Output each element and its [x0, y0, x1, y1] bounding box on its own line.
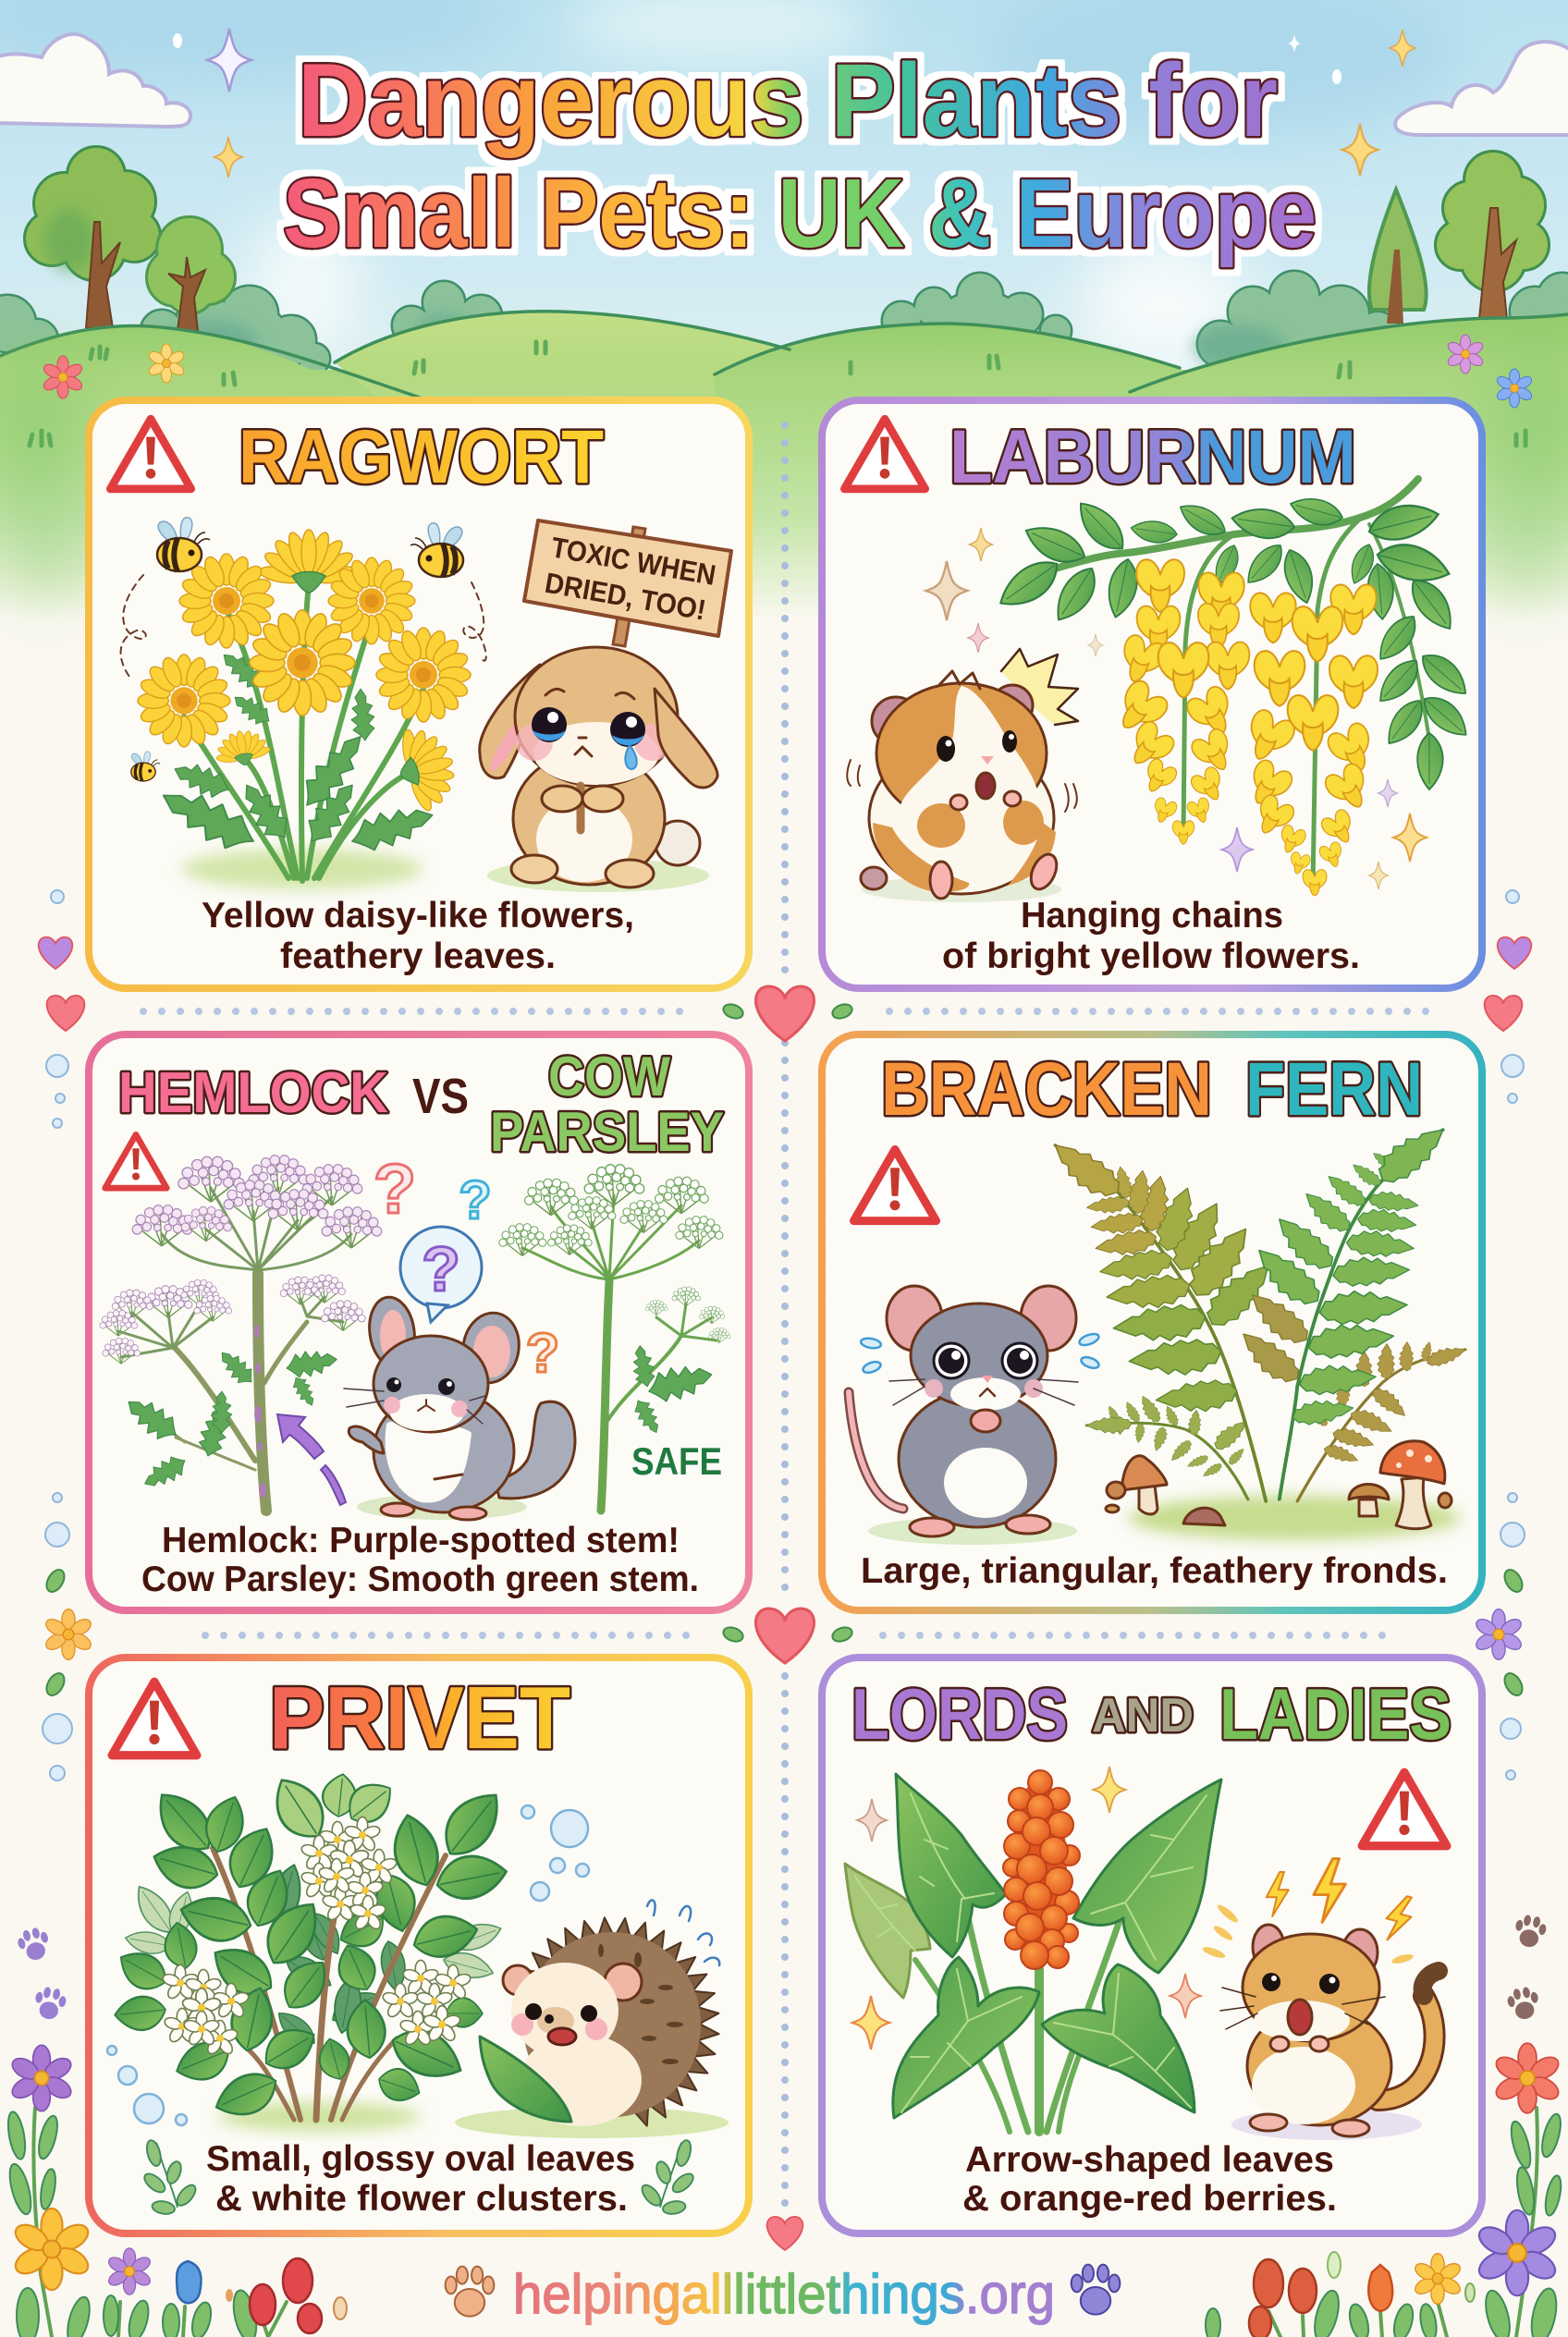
- panel: bracken fern: [822, 1034, 1482, 1610]
- heading: vs: VS: [412, 1069, 469, 1124]
- panel: privet: [89, 1658, 749, 2233]
- caption: [202, 896, 634, 976]
- heading: lords and ladies: LORDS: [851, 1673, 1068, 1755]
- paw left: [446, 2267, 494, 2317]
- caption: Arrow-shaped leaves: [965, 2140, 1334, 2180]
- arrow pointing at stem: [277, 1414, 346, 1505]
- frond: green main: [1231, 1117, 1454, 1499]
- sign: toxic when dried: [524, 520, 731, 646]
- icons: bees: [121, 518, 486, 781]
- question marks: [374, 1150, 559, 1384]
- panel: ragwort: [89, 400, 749, 988]
- caption: [962, 2140, 1337, 2219]
- heading: hemlock: HEMLOCK: [118, 1061, 388, 1125]
- heading: privet: PRIVET: [269, 1669, 570, 1768]
- illustration: chinchilla: [344, 1294, 575, 1520]
- heading: cow parsley: COW: [548, 1046, 670, 1107]
- sign: toxic when dried: TOXIC WHEN: [549, 531, 718, 592]
- sparkles: [852, 1767, 1201, 2049]
- sparkles: [926, 528, 1427, 889]
- cloud left: [0, 34, 190, 127]
- panel: hemlock vs cow parsley: [89, 1034, 749, 1610]
- illustration: worried mouse: [849, 1286, 1100, 1545]
- heading: bracken fern: [881, 1047, 1423, 1132]
- frond: olive main: [1042, 1135, 1280, 1501]
- caption: [141, 1521, 699, 1599]
- caption: Yellow daisy-like flowers,: [202, 896, 634, 936]
- panel: laburnum: [822, 400, 1482, 988]
- caption: feathery leaves.: [280, 936, 556, 976]
- warning icon: [853, 1149, 937, 1221]
- lords and ladies plant: [845, 1770, 1221, 2132]
- ragwort plant: [138, 530, 471, 889]
- panel: lords and ladies: [822, 1658, 1482, 2233]
- caption: [206, 2139, 635, 2219]
- warning icon: [844, 419, 925, 489]
- caption: of bright yellow flowers.: [942, 936, 1360, 976]
- heading: laburnum: LABURNUM: [949, 415, 1356, 499]
- cow parsley plant: [499, 1165, 730, 1511]
- caption: Hemlock: Purple-spotted stem!: [162, 1521, 680, 1560]
- laburnum branch: [992, 479, 1475, 896]
- sign: toxic when dried: DRIED, TOO!: [543, 567, 708, 627]
- caption: & white flower clusters.: [215, 2179, 628, 2219]
- frond: left low: [1086, 1394, 1252, 1499]
- bushes: [0, 272, 1568, 421]
- warning icon: [112, 1682, 197, 1756]
- trees: [26, 148, 1548, 331]
- title: Dangerous Plants for: [298, 43, 1278, 158]
- caption: Hanging chains: [1021, 896, 1283, 936]
- cloud right: [1395, 42, 1568, 135]
- privet bush: [113, 1769, 511, 2132]
- gutter decorations: dots, hearts and bubbles: [15, 425, 1548, 2250]
- question marks: ?: [459, 1170, 492, 1230]
- question marks: ?: [422, 1234, 460, 1304]
- illustration: startled dormouse: [1220, 1925, 1439, 2140]
- frond: right brown: [1297, 1340, 1468, 1501]
- bracken fronds: [1042, 1117, 1468, 1540]
- footer: website: [446, 2263, 1120, 2325]
- meadow flowers: [42, 335, 1534, 408]
- title: [283, 43, 1317, 268]
- hemlock plant: [100, 1156, 382, 1511]
- caption: Large, triangular, feathery fronds.: [861, 1551, 1448, 1591]
- heading: lords and ladies: [851, 1673, 1452, 1755]
- bubbles: [107, 1805, 589, 2125]
- heading: bracken fern: BRACKEN: [881, 1047, 1212, 1132]
- heading: lords and ladies: LADIES: [1219, 1673, 1452, 1755]
- mushrooms and ground: [1106, 1441, 1452, 1529]
- footer flowers right: [1206, 2043, 1564, 2337]
- paw right: [1072, 2265, 1120, 2315]
- illustration: surprised hamster: [847, 649, 1078, 902]
- heading: cow parsley: PARSLEY: [490, 1101, 724, 1163]
- lightning bolts: [1201, 1858, 1416, 1965]
- question marks: ?: [526, 1322, 559, 1384]
- heading: ragwort: RAGWORT: [239, 415, 604, 499]
- question marks: ?: [374, 1150, 416, 1229]
- warning icon: [105, 1134, 166, 1188]
- rolling hills: [0, 312, 1568, 619]
- title: Small Pets: UK & Europe: [283, 159, 1317, 268]
- caption: Cow Parsley: Smooth green stem.: [141, 1560, 699, 1599]
- label: safe: SAFE: [631, 1439, 722, 1483]
- sky sparkles: [173, 29, 1415, 177]
- caption: [942, 896, 1360, 976]
- footer flowers left: [6, 2045, 347, 2337]
- warning icon: [1362, 1772, 1447, 1846]
- illustration: hedgehog: [455, 1900, 729, 2138]
- illustration: sad rabbit: [480, 647, 717, 892]
- website address: helpingalllittlethings.org: [513, 2263, 1055, 2325]
- caption: & orange-red berries.: [962, 2179, 1337, 2219]
- caption: Small, glossy oval leaves: [206, 2139, 635, 2179]
- heading: lords and ladies: AND: [1092, 1689, 1194, 1743]
- warning icon: [110, 419, 191, 489]
- sprigs: [141, 2139, 696, 2216]
- heading: cow parsley: [490, 1046, 724, 1163]
- heading: bracken fern: FERN: [1245, 1047, 1423, 1132]
